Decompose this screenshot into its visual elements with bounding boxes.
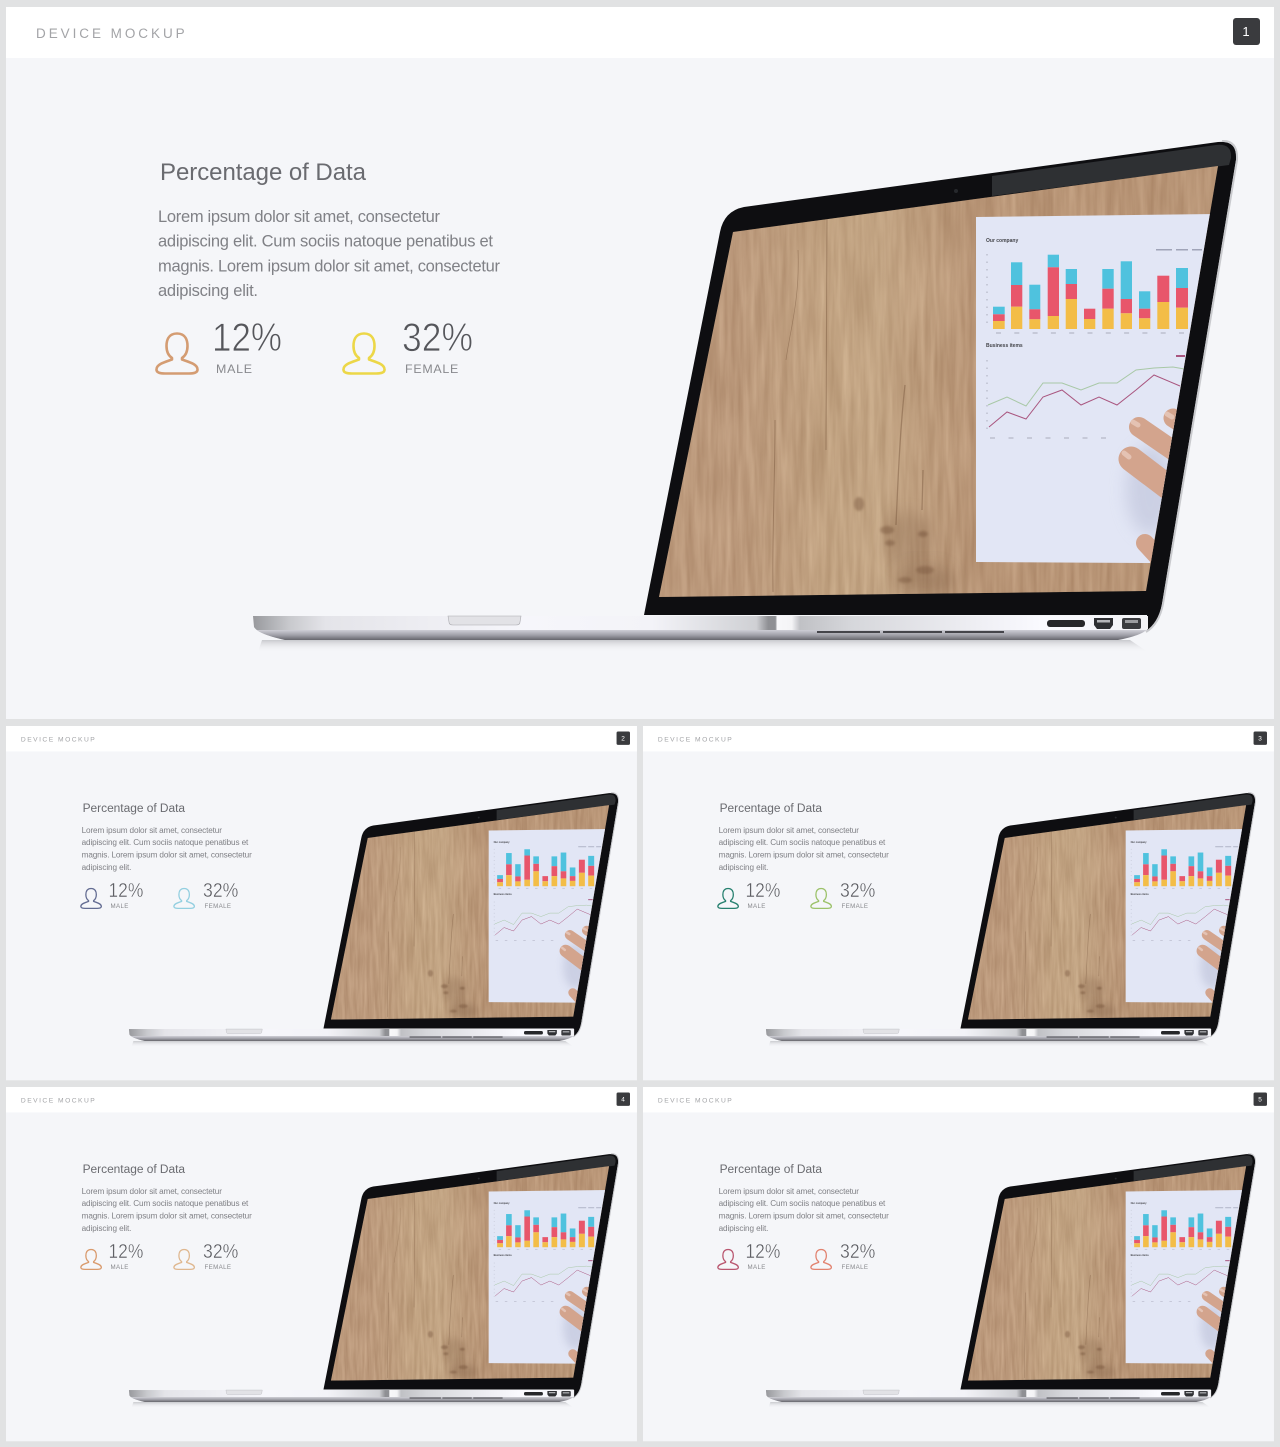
slide 1 body text: adipiscing elit. xyxy=(158,282,258,300)
slide 1 body text: Lorem ipsum dolor sit amet, consectetur xyxy=(158,208,440,226)
slide 3 body text: adipiscing elit. xyxy=(719,863,768,872)
slide 3 body text: adipiscing elit. Cum sociis natoque penatibus et xyxy=(719,838,886,847)
slide 4 body text: Lorem ipsum dolor sit amet, consectetur xyxy=(82,1187,222,1196)
slide 5 body text: magnis. Lorem ipsum dolor sit amet, consectetur xyxy=(719,1212,889,1221)
slide 3 heading: Percentage of Data xyxy=(720,801,822,815)
slide 1 header label: DEVICE MOCKUP xyxy=(36,26,188,41)
male label: MALE xyxy=(747,903,766,910)
icon: male person xyxy=(156,334,198,374)
slide 2 body text xyxy=(82,826,252,872)
female label: FEMALE xyxy=(842,1264,868,1271)
slide 3 laptop mockup xyxy=(764,793,1256,1047)
male label: MALE xyxy=(110,903,129,910)
slide 4 body text: magnis. Lorem ipsum dolor sit amet, consectetur xyxy=(82,1212,252,1221)
female percentage: 32% xyxy=(840,1241,875,1263)
slide 2 header label: DEVICE MOCKUP xyxy=(21,736,96,743)
slide 4 body text: adipiscing elit. Cum sociis natoque penatibus et xyxy=(82,1199,249,1208)
male percentage: 12% xyxy=(109,1241,143,1263)
slide 2 body text: magnis. Lorem ipsum dolor sit amet, consectetur xyxy=(82,851,252,860)
female label: FEMALE xyxy=(405,362,459,376)
icon: female person xyxy=(811,888,831,908)
slide 2 body text: adipiscing elit. Cum sociis natoque penatibus et xyxy=(82,838,249,847)
slide 4 heading: Percentage of Data xyxy=(83,1162,185,1176)
female percentage: 32% xyxy=(840,880,875,902)
slide 2 body text: Lorem ipsum dolor sit amet, consectetur xyxy=(82,826,222,835)
slide 2 number badge: 2 xyxy=(621,735,625,742)
male label: MALE xyxy=(216,362,253,376)
slide 5 body text: Lorem ipsum dolor sit amet, consectetur xyxy=(719,1187,859,1196)
slide 3 body text: magnis. Lorem ipsum dolor sit amet, consectetur xyxy=(719,851,889,860)
female percentage: 32% xyxy=(402,316,473,360)
female percentage: 32% xyxy=(203,1241,238,1263)
slide 5 body text: adipiscing elit. Cum sociis natoque penatibus et xyxy=(719,1199,886,1208)
panel: slide 3 xyxy=(643,726,1274,1080)
slide 5 body xyxy=(643,1087,1274,1441)
panel: slide 5 xyxy=(643,1087,1274,1441)
panel: slide 2 xyxy=(6,726,637,1080)
slide 3 body xyxy=(643,726,1274,1080)
slide 4 number badge xyxy=(617,1092,630,1106)
icon: female person xyxy=(174,888,194,908)
slide 5 number badge xyxy=(1254,1092,1267,1106)
slide 5 body text xyxy=(719,1187,889,1233)
slide 3 header bar xyxy=(643,726,1274,751)
slide 1 body xyxy=(6,7,1274,719)
slide 1 body text xyxy=(158,208,500,300)
slide 2 header bar xyxy=(6,726,637,751)
icon: male person xyxy=(81,1249,101,1269)
slide 5 body text: adipiscing elit. xyxy=(719,1224,768,1233)
slide 3 number badge xyxy=(1254,731,1267,745)
slide 1 number badge xyxy=(1233,18,1260,45)
male percentage: 12% xyxy=(109,880,143,902)
slide 3 body text xyxy=(719,826,889,872)
slide 3 number badge: 3 xyxy=(1258,735,1262,742)
icon: male person xyxy=(718,888,738,908)
slide 1 number badge: 1 xyxy=(1242,24,1250,39)
male percentage: 12% xyxy=(212,316,282,360)
female label: FEMALE xyxy=(205,903,231,910)
slide 2 body xyxy=(6,726,637,1080)
slide 1 header bar xyxy=(6,7,1274,58)
male label: MALE xyxy=(747,1264,766,1271)
slide 4 number badge: 4 xyxy=(621,1096,625,1103)
female label: FEMALE xyxy=(842,903,868,910)
slide 1 heading: Percentage of Data xyxy=(160,159,367,186)
slide 5 header bar xyxy=(643,1087,1274,1112)
panel: slide 1 xyxy=(6,7,1274,719)
icon: male person xyxy=(718,1249,738,1269)
male percentage: 12% xyxy=(746,880,780,902)
icon: female person xyxy=(343,334,385,374)
slide 1 body text: magnis. Lorem ipsum dolor sit amet, consectetur xyxy=(158,258,500,276)
icon: male person xyxy=(81,888,101,908)
slide 1 body text: adipiscing elit. Cum sociis natoque penatibus et xyxy=(158,232,493,250)
male label: MALE xyxy=(110,1264,129,1271)
male percentage: 12% xyxy=(746,1241,780,1263)
slide 2 body text: adipiscing elit. xyxy=(82,863,131,872)
slide 2 number badge xyxy=(617,731,630,745)
slide 1 laptop mockup xyxy=(250,141,1237,652)
icon: female person xyxy=(811,1249,831,1269)
slide 5 heading: Percentage of Data xyxy=(720,1162,822,1176)
slide 3 body text: Lorem ipsum dolor sit amet, consectetur xyxy=(719,826,859,835)
slide 5 number badge: 5 xyxy=(1258,1096,1262,1103)
female label: FEMALE xyxy=(205,1264,231,1271)
slide 2 laptop mockup xyxy=(127,793,619,1047)
slide 2 heading: Percentage of Data xyxy=(83,801,185,815)
slide 4 header bar xyxy=(6,1087,637,1112)
slide 4 body xyxy=(6,1087,637,1441)
panel: slide 4 xyxy=(6,1087,637,1441)
slide 4 laptop mockup xyxy=(127,1154,619,1408)
slide 4 header label: DEVICE MOCKUP xyxy=(21,1097,96,1104)
female percentage: 32% xyxy=(203,880,238,902)
icon: female person xyxy=(174,1249,194,1269)
slide 5 laptop mockup xyxy=(764,1154,1256,1408)
slide 3 header label: DEVICE MOCKUP xyxy=(658,736,733,743)
slide 4 body text: adipiscing elit. xyxy=(82,1224,131,1233)
slide 5 header label: DEVICE MOCKUP xyxy=(658,1097,733,1104)
slide 4 body text xyxy=(82,1187,252,1233)
